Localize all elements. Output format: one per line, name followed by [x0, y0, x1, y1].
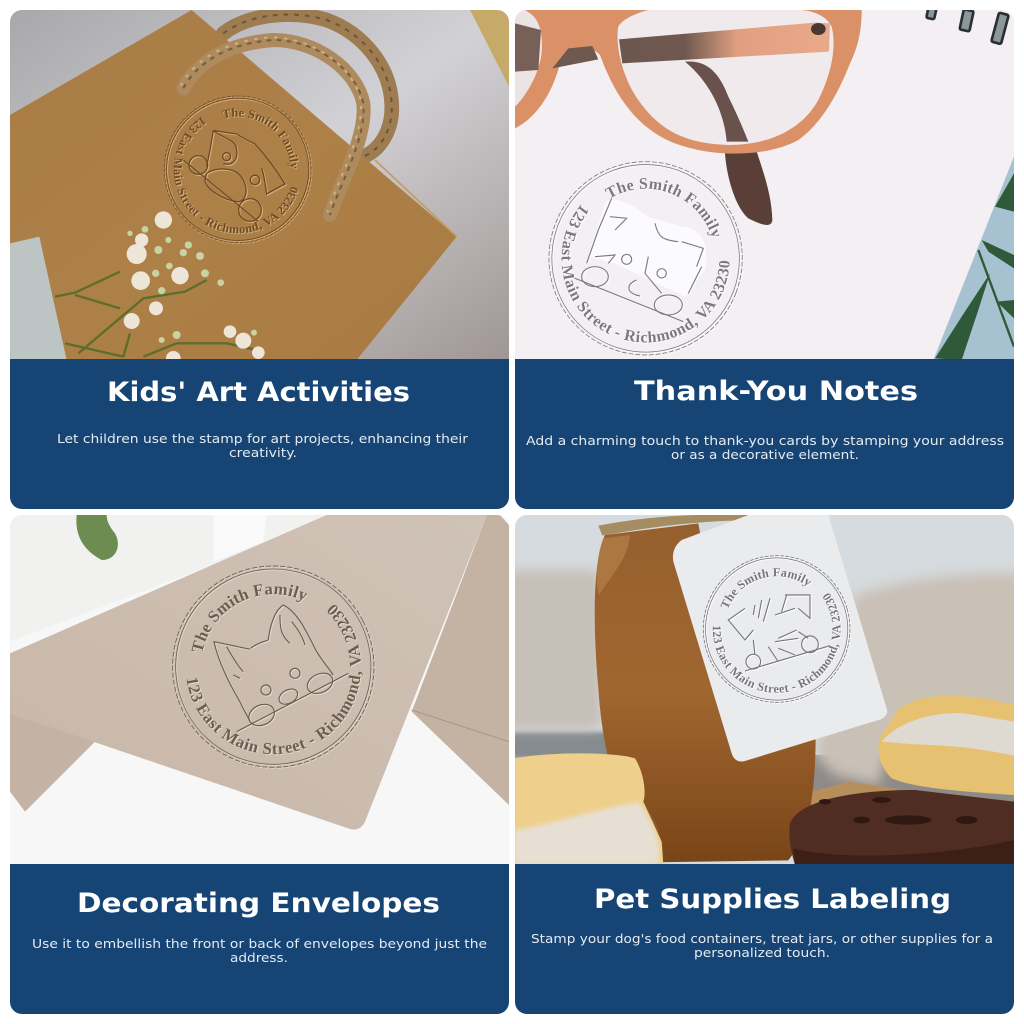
photo: beige envelopes with leaf	[10, 515, 509, 830]
heading: Kids' Art Activities	[107, 377, 410, 408]
body text: Stamp your dog's food containers, treat jars, or other supplies for a	[531, 931, 993, 946]
body text: personalized touch.	[694, 945, 830, 960]
temple arm	[685, 61, 748, 147]
caption band	[10, 359, 509, 509]
emboss seal: The Smith Family	[222, 108, 300, 170]
emboss seal	[548, 161, 744, 356]
body text	[58, 434, 468, 460]
caption band	[10, 864, 509, 1014]
body text: creativity.	[229, 445, 297, 460]
hang tag	[673, 515, 887, 761]
emboss seal	[702, 555, 852, 704]
panel: decorating envelopes	[10, 515, 509, 1014]
emboss seal	[172, 566, 376, 769]
body text: or as a decorative element.	[671, 447, 859, 462]
panel: pet supplies labeling	[515, 515, 1014, 1014]
emboss seal: 123 East Main Street - Richmond, VA 23230	[186, 605, 364, 756]
heading: Pet Supplies Labeling	[594, 884, 951, 915]
body text	[33, 938, 486, 962]
cookies	[515, 696, 1014, 865]
dog line art	[183, 131, 285, 222]
body text: Add a charming touch to thank-you cards by stamping your address	[526, 433, 1004, 448]
photo: kraft bag with twine and flowers	[10, 10, 509, 359]
dog line art	[728, 595, 830, 671]
white emboss sheen	[588, 200, 707, 297]
glasses frame	[515, 10, 862, 154]
emboss seal: 123 East Main Street - Richmond, VA 23230	[174, 116, 299, 234]
body text	[532, 934, 992, 960]
emboss seal: 123 East Main Street - Richmond, VA 23230	[562, 204, 730, 344]
body text: Use it to embellish the front or back of envelopes beyond just the	[32, 936, 487, 951]
heading: Thank-You Notes	[634, 376, 918, 407]
heading: Decorating Envelopes	[77, 888, 440, 919]
jar	[595, 523, 816, 862]
panel: thank-you notes	[515, 10, 1014, 509]
body text: address.	[230, 950, 288, 965]
body text	[526, 436, 1004, 459]
panel: kids' art activities	[10, 10, 509, 509]
photo: jar with tag and cookies	[515, 515, 1014, 864]
emboss seal: 123 East Main Street - Richmond, VA 23230	[712, 594, 842, 694]
dog line art	[575, 198, 703, 322]
dog line art	[214, 605, 348, 732]
emboss seal: The Smith Family	[604, 178, 720, 237]
caption band	[515, 864, 1014, 1014]
photo: glasses on notebook	[515, 10, 1014, 359]
body text: Let children use the stamp for art projects, enhancing their	[57, 431, 469, 446]
emboss seal: The Smith Family	[192, 584, 308, 652]
emboss seal: The Smith Family	[720, 568, 812, 609]
caption band	[515, 359, 1014, 509]
